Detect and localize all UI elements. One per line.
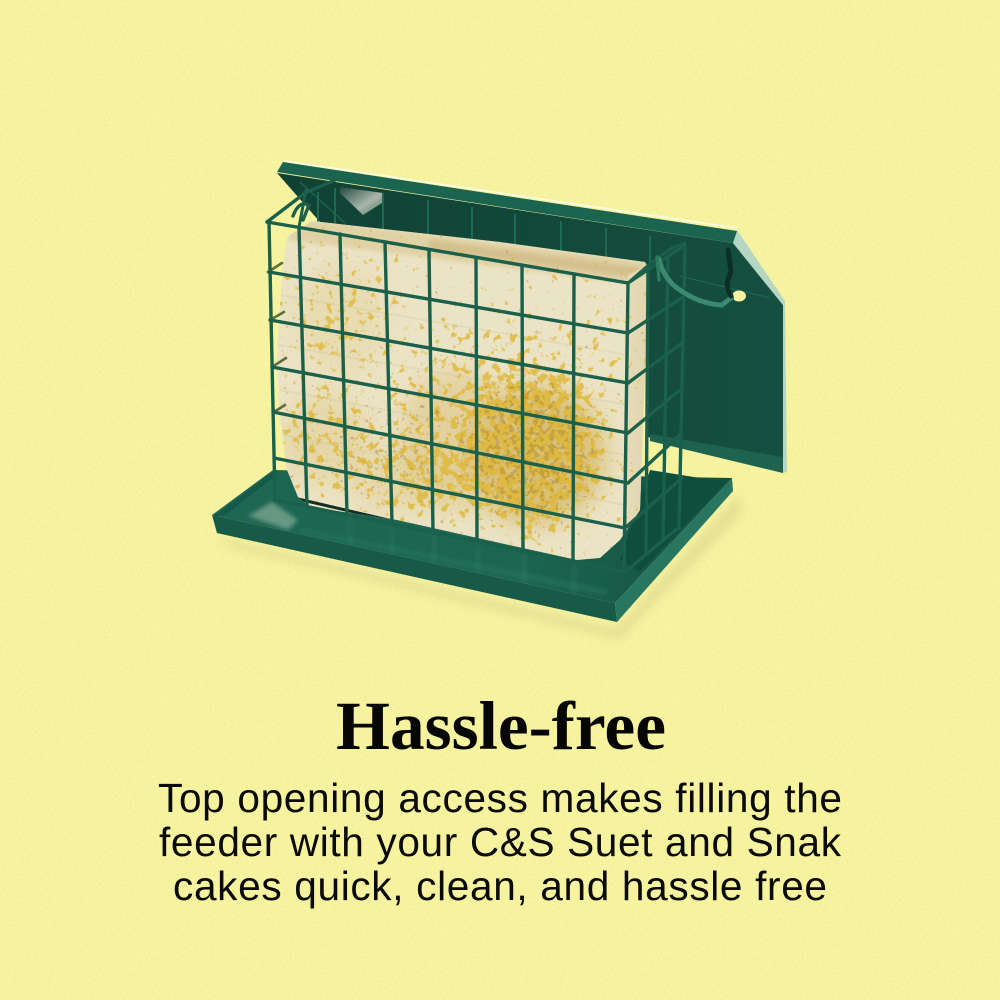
- cage front horizontals: [267, 222, 628, 572]
- cage front verticals: [269, 222, 628, 572]
- description text: [158, 775, 842, 909]
- hinged roof: [277, 161, 787, 473]
- suet cake: [277, 221, 646, 560]
- yellow seed speckle: [260, 235, 650, 555]
- chain: [628, 243, 731, 305]
- molded score lines: [278, 294, 626, 506]
- wire cage: [267, 180, 685, 572]
- heading: Hassle-free: [336, 688, 666, 764]
- cage side wires: [625, 245, 685, 572]
- description text: Top opening access makes filling the: [158, 775, 842, 821]
- tray shadow: [216, 495, 745, 640]
- drip tray: [212, 470, 733, 622]
- description text: feeder with your C&S Suet and Snak: [159, 819, 842, 865]
- rear cage wires: [318, 188, 650, 262]
- mounting hole: [732, 290, 746, 302]
- left top side wire and hook: [267, 180, 335, 412]
- tan grain speckle: [320, 360, 615, 540]
- shadow under cake: [298, 498, 390, 519]
- broad seed tint: [280, 265, 605, 525]
- description text: cakes quick, clean, and hassle free: [173, 863, 827, 909]
- product: suet feeder: [212, 161, 787, 640]
